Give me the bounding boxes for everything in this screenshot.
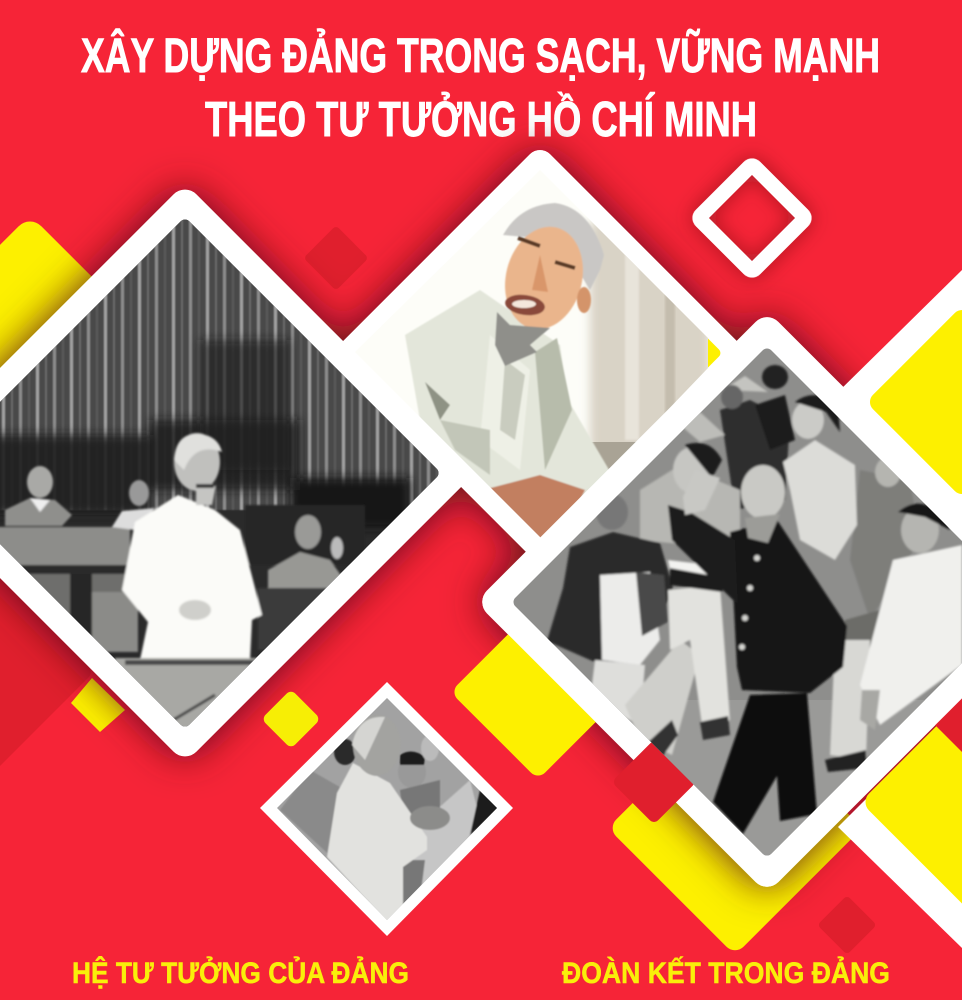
light jacket man bbox=[783, 440, 857, 560]
podium bbox=[114, 656, 257, 726]
left dark jacket man bbox=[547, 532, 673, 663]
centre white trousers bbox=[668, 585, 730, 725]
decorative diamond: small yellow centre bbox=[261, 689, 321, 749]
man behind bbox=[673, 447, 711, 493]
caption left: HỆ TƯ TƯỞNG CỦA ĐẢNG bbox=[72, 956, 409, 990]
hair bbox=[503, 203, 604, 290]
title bbox=[81, 28, 880, 147]
desk left bbox=[0, 527, 130, 565]
face bbox=[504, 226, 584, 329]
frame shadows bbox=[0, 144, 962, 893]
seated delegate right bbox=[295, 515, 321, 549]
decorative diamond: large yellow bottom bbox=[608, 701, 862, 955]
title: THEO TƯ TƯỞNG HỒ CHÍ MINH bbox=[205, 92, 757, 147]
seated delegate bbox=[27, 466, 53, 498]
bundle bbox=[600, 572, 660, 665]
decorative diamond: yellow lower right bbox=[861, 678, 962, 926]
speaker head bbox=[174, 433, 220, 491]
caption right: ĐOÀN KẾT TRONG ĐẢNG bbox=[562, 956, 890, 990]
speaker body bbox=[122, 495, 262, 660]
walking group photo bbox=[500, 340, 962, 870]
decorative diamond: yellow right bbox=[866, 306, 962, 498]
panel: small photo bbox=[260, 682, 513, 936]
raised arm bbox=[668, 505, 738, 605]
decorative diamond: yellow top left bbox=[0, 215, 160, 475]
decorative diamond: dark red top bbox=[303, 225, 369, 291]
portrait photo bbox=[404, 202, 708, 538]
right background figure bbox=[850, 470, 916, 613]
decorative diamond: large yellow centre bbox=[450, 604, 626, 780]
panel: right photo bbox=[476, 311, 962, 893]
yellow accent bbox=[657, 320, 723, 386]
left trousers bbox=[590, 660, 645, 725]
plaid scarf bbox=[636, 572, 668, 636]
hands bbox=[410, 806, 450, 830]
right bench bbox=[245, 505, 365, 565]
decorative diamond: dark red bottom bbox=[817, 895, 877, 955]
head bbox=[741, 465, 785, 519]
beard bbox=[495, 312, 550, 366]
decorative diamond: small yellow behind left photo bbox=[71, 678, 125, 732]
nose shade bbox=[532, 255, 548, 292]
decorative diamond: white outline bbox=[698, 164, 806, 272]
shirt bbox=[405, 290, 615, 505]
buttons bbox=[739, 555, 760, 650]
decorative diamond: dark red left bbox=[0, 573, 94, 771]
panel: left photo bbox=[0, 183, 475, 763]
seated delegate bbox=[129, 480, 149, 506]
light trousers right bbox=[830, 640, 870, 760]
white coat bbox=[327, 763, 427, 922]
desk right bbox=[256, 587, 326, 651]
hand bbox=[483, 475, 585, 540]
head bbox=[353, 714, 401, 776]
white jacket man bbox=[860, 545, 962, 725]
background crowd bbox=[720, 400, 790, 510]
frame bbox=[476, 311, 962, 893]
speaker hand bbox=[179, 600, 211, 620]
legs bbox=[713, 693, 817, 834]
frame bbox=[329, 144, 751, 566]
frame bbox=[0, 183, 475, 763]
congress photo bbox=[0, 210, 450, 740]
decorative band: white right bbox=[835, 270, 962, 522]
clapping group photo bbox=[270, 690, 505, 925]
Ho Chi Minh jacket bbox=[730, 520, 847, 693]
panel: centre portrait bbox=[343, 150, 736, 552]
decorative diamond: dark red right bbox=[922, 672, 962, 752]
mouth bbox=[504, 294, 546, 316]
frame bbox=[260, 682, 513, 936]
decorative band: white lower right bbox=[838, 703, 962, 948]
dark red accent diamond bbox=[612, 740, 696, 824]
